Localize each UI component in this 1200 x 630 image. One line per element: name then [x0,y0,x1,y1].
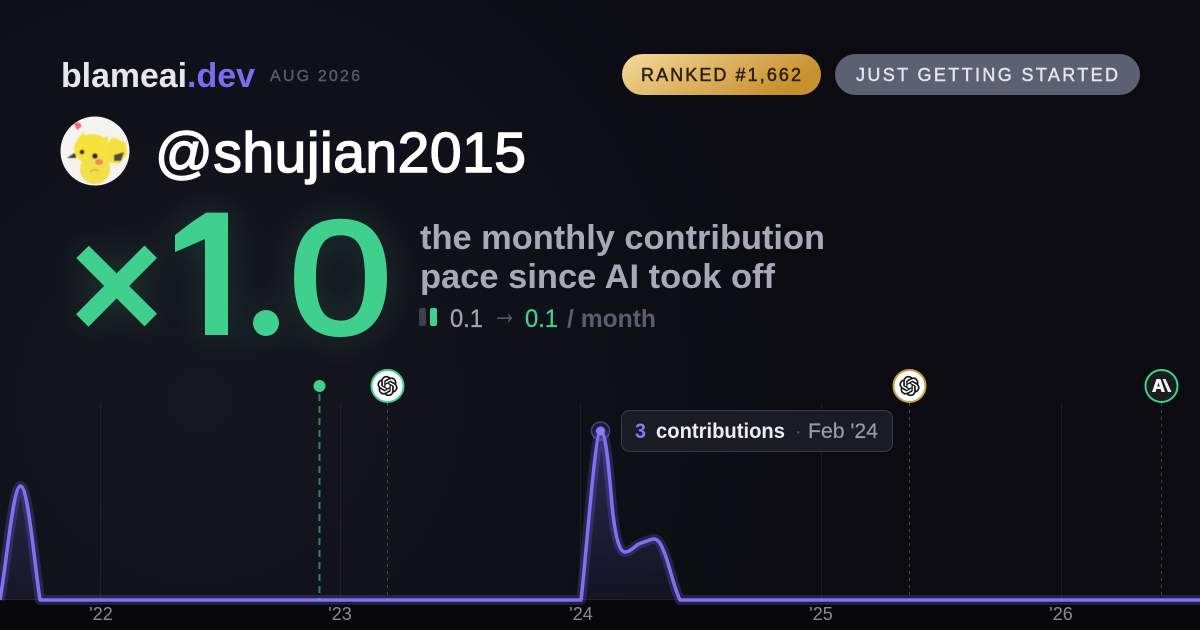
axis labels: '23 [328,604,352,624]
area fill [0,431,680,600]
description [420,219,825,296]
axis labels: '25 [809,604,833,624]
badge: rank: RANKED #1,662 [641,65,801,85]
pace comparison: → [492,291,517,332]
contribution line [0,431,1200,600]
description: the monthly contribution [420,219,825,257]
hero multiplier: 0 [290,189,391,368]
date label: AUG 2026 [270,68,360,85]
milestone: AI takeoff [314,380,326,600]
axis labels [89,604,1073,624]
pace comparison: / month [567,305,656,333]
site logo: blameai [61,57,187,95]
milestone: Anthropic [1146,370,1178,600]
pace comparison: 0.1 [450,305,483,333]
milestone: OpenAI gold [894,370,926,600]
hero multiplier: 1 [166,180,262,372]
hero multiplier: . [233,122,299,390]
avatar: pikachu [60,116,130,186]
badge: status [835,54,1140,95]
axis labels: '22 [89,604,113,624]
site logo: .dev [187,57,255,95]
chart [0,370,1200,624]
tooltip: · [795,421,802,443]
hero multiplier [76,204,399,347]
tooltip: contributions [656,420,785,443]
username: @shujian2015 [155,121,526,185]
tooltip [622,410,892,452]
pace comparison: 0.1 [525,305,558,333]
tooltip: 3 [635,420,646,443]
axis labels: '26 [1049,604,1073,624]
tooltip: Feb '24 [808,420,878,443]
site logo [61,57,255,95]
hero multiplier: × [69,194,164,375]
milestone: OpenAI green [372,370,404,600]
badge: rank [622,54,821,95]
description: pace since AI took off [420,258,776,296]
axis labels: '24 [569,604,593,624]
pace comparison [419,291,656,333]
badge: status: JUST GETTING STARTED [856,65,1118,85]
peak marker [592,422,610,440]
